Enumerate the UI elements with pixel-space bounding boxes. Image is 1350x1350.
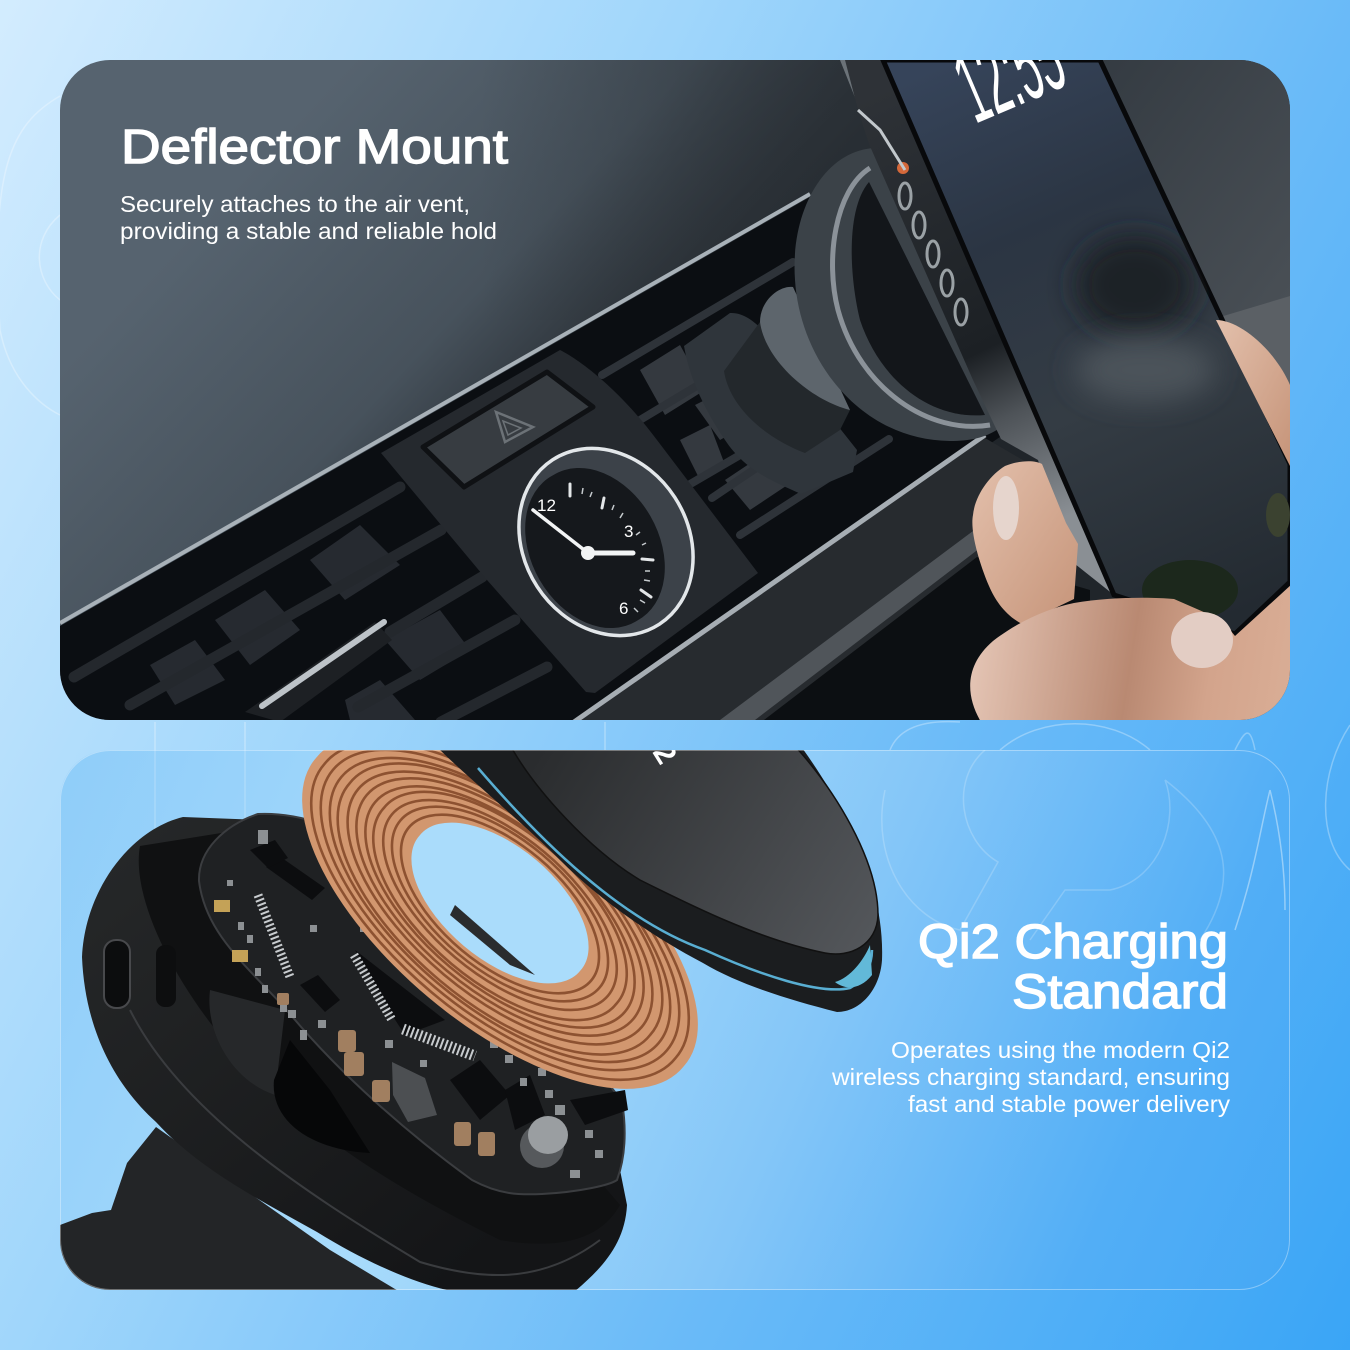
clock numerals <box>537 496 633 618</box>
dashboard surface <box>60 60 1290 720</box>
electrolytic capacitor <box>520 1116 568 1168</box>
phone body <box>883 60 1290 634</box>
description <box>120 191 497 244</box>
left vent louvres <box>150 525 470 720</box>
title: Deflector Mount <box>121 121 508 174</box>
clock numerals: 6 <box>619 599 628 618</box>
title <box>918 916 1228 1019</box>
clock <box>519 448 693 636</box>
phone clock: 12:55 <box>939 0 1080 145</box>
vent recess <box>60 170 1010 720</box>
lower chrome trim <box>574 435 985 722</box>
black disc <box>435 738 882 1012</box>
hazard button <box>423 372 593 487</box>
pcb <box>199 814 628 1194</box>
vent clip <box>684 313 857 494</box>
hand: thumb <box>972 461 1078 624</box>
smd parts <box>227 830 603 1178</box>
magnetic disc <box>795 148 1000 441</box>
clock numerals: 12 <box>537 496 556 515</box>
hand: lower finger <box>970 584 1292 722</box>
right vent slats <box>602 262 889 535</box>
screen scenery <box>1075 235 1290 620</box>
title: Standard <box>1012 966 1228 1019</box>
coil centre opening <box>411 823 589 983</box>
disc logo: 2 <box>646 738 683 770</box>
dashboard right section <box>1100 60 1290 320</box>
left vent slats <box>74 487 547 722</box>
description: Operates using the modern Qi2 <box>891 1037 1230 1063</box>
title: Qi2 Charging <box>918 916 1228 969</box>
clock hands <box>533 510 633 560</box>
panel: qi2 charging <box>60 735 1290 1292</box>
hand: upper right finger <box>1216 320 1290 466</box>
description <box>831 1037 1231 1117</box>
clock numerals: 3 <box>624 522 633 541</box>
usb port <box>104 940 130 1008</box>
capacitors <box>277 993 495 1156</box>
panel: deflector mount <box>60 0 1292 722</box>
mount swivel <box>724 287 850 453</box>
description: wireless charging standard, ensuring <box>831 1064 1230 1090</box>
ic packages <box>250 840 628 1130</box>
lower console <box>582 438 992 720</box>
upper chrome trim <box>60 194 810 623</box>
stand <box>60 1127 400 1292</box>
description: Securely attaches to the air vent, <box>120 191 470 217</box>
vent knob <box>245 622 392 722</box>
pins <box>258 895 475 1056</box>
description: fast and stable power delivery <box>908 1091 1231 1117</box>
clock panel <box>381 350 758 693</box>
description: providing a stable and reliable hold <box>120 218 497 244</box>
copper coil <box>302 735 698 1089</box>
phone edge <box>840 60 1114 595</box>
housing <box>82 817 627 1292</box>
right vent louvres <box>640 345 795 510</box>
fingernail <box>1171 612 1233 668</box>
